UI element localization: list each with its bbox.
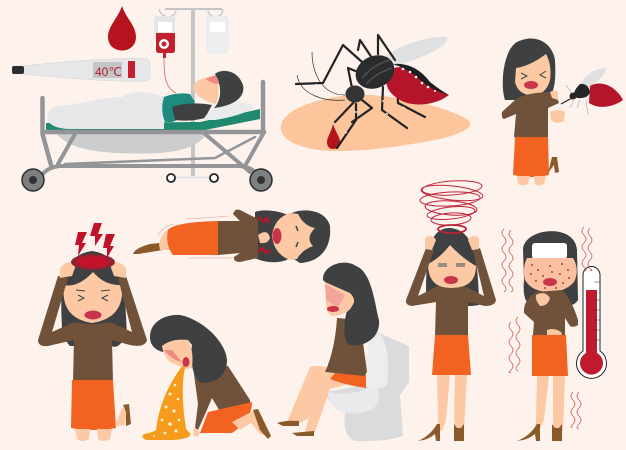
woman with dizziness [406,228,496,441]
mosquito drinking blood [296,35,449,148]
sick patient lying in bed [47,71,254,129]
woman on the toilet [277,263,409,441]
shiver lines [502,227,592,429]
woman with rash and fever [517,231,578,441]
small blood-filled mosquito [561,68,623,115]
woman vomiting [150,315,271,439]
IV drip stand with bags [154,8,228,182]
skin patch [281,95,470,151]
vomit stream and puddle [142,365,190,440]
large fever thermometer [576,266,607,378]
hospital bed [22,82,272,191]
blood drop on skin [327,124,340,149]
woman lying with convulsions [133,210,330,263]
thermometer showing 40 degrees: 40℃ [95,65,122,79]
woman bitten by mosquito [502,38,565,186]
thermometer showing 40 degrees [12,58,150,81]
blood drop icon [108,6,136,50]
dizzy scribble above head [420,179,484,233]
lightning bolts of pain [75,223,115,258]
woman with headache kneeling [38,251,147,441]
